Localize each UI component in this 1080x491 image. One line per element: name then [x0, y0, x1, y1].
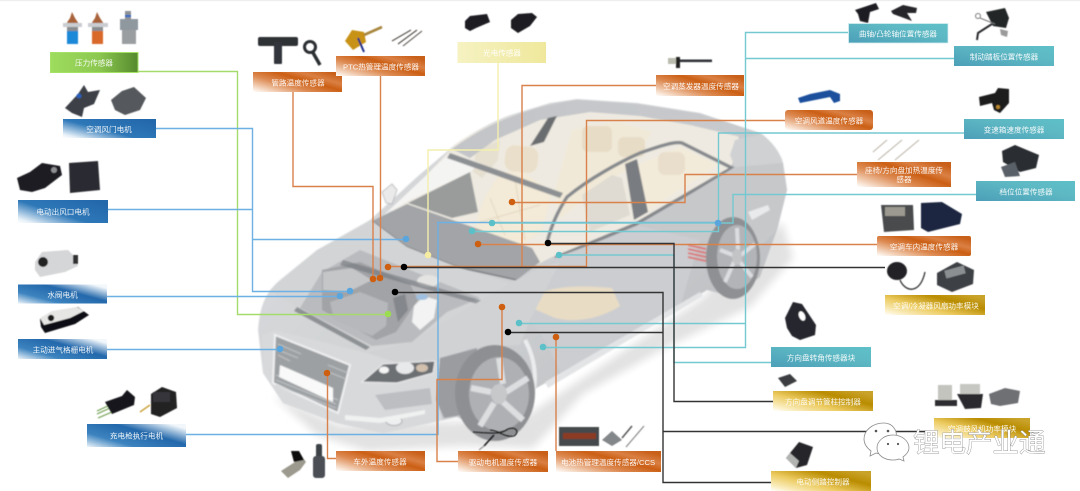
icons: charging gun actuator: [97, 387, 177, 418]
connector line: yellow photoelectric sensor: [428, 63, 498, 255]
watermark: brand text: 锂电产业通: [913, 428, 1046, 458]
suspension behind wheel: [436, 348, 477, 418]
label: evaporator temperature sensor: [656, 75, 744, 96]
label: transmission speed sensor: [964, 119, 1064, 139]
icon: evaporator temperature sensor: [668, 57, 712, 68]
label: battery thermal sensor / CCS: [556, 451, 661, 472]
engine block: [330, 292, 388, 336]
label: charging gun actuator: 充电枪执行电机: [110, 430, 163, 440]
label: seat / steering wheel heating temperature sensor: [857, 162, 951, 187]
label: AC / condenser fan power module: [885, 295, 985, 315]
air intake pipes: [323, 268, 372, 292]
label: photoelectric sensor: 光电传感器: [483, 48, 521, 58]
icons: pressure sensors: [63, 11, 138, 44]
front bumper: [262, 330, 442, 433]
grille: [273, 335, 350, 413]
label: active grille shutter motor: [18, 339, 107, 359]
label: pipeline temperature sensor: [253, 72, 342, 92]
icons: cabin temperature sensors: [881, 202, 962, 232]
greenhouse interior: [388, 101, 739, 270]
icons: battery thermal sensors and CCS: [559, 426, 644, 447]
side mirror: [382, 184, 397, 204]
engine bay: [300, 250, 480, 346]
white expansion tank: [417, 275, 439, 287]
label: blower power module: [934, 418, 1030, 438]
label: steering column adjustment controller: 方向盘调节管柱控制器: [785, 396, 861, 406]
hood surface: [270, 221, 510, 353]
reservoir blue cap: [416, 294, 428, 300]
connector lines: teal position sensors: [472, 32, 976, 362]
front seat headrest: [504, 144, 539, 174]
label: drive motor temperature sensor: 驱动电机温度传感器: [469, 457, 538, 467]
label: brake pedal position sensor: 制动踏板位置传感器: [970, 52, 1039, 62]
label: electric air outlet motor: [18, 200, 108, 223]
icons: blower power modules: [935, 384, 1020, 409]
label: pressure sensor: 压力传感器: [75, 58, 113, 68]
cowl dark line: [372, 221, 517, 280]
label: seat / steering wheel heating temperature sensor: 座椅/方向盘加热温度传: [865, 165, 943, 175]
label: electric side step controller: 电动侧踏控制器: [796, 476, 850, 486]
connector lines: blue motors: [107, 128, 718, 434]
label: cabin temperature sensor: 空调车内温度传感器: [890, 242, 959, 252]
label: evaporator temperature sensor: 空调蒸发器温度传感器: [663, 81, 739, 91]
label: water valve motor: [18, 284, 107, 304]
label: seat / steering wheel heating temperature sensor: 感器: [896, 174, 912, 184]
door sill highlight: [545, 292, 703, 388]
label: steering angle sensor module: 方向盘转角传感器块: [787, 352, 856, 362]
icon: gear position sensor: [1001, 145, 1039, 177]
grille slats: [276, 344, 348, 408]
connector lines: black controllers: [395, 244, 934, 482]
icons: PTC thermal sensors: [345, 27, 422, 52]
label: steering column adjustment controller: [773, 391, 873, 411]
icon: air duct temperature sensor: [798, 90, 840, 103]
top edge strip: [0, 0, 1080, 1]
front wheel: [455, 345, 535, 441]
rear seat headrests: [582, 126, 645, 157]
icon: brake pedal position sensor: [976, 8, 1009, 40]
icons: electric air outlet motors: [17, 161, 100, 193]
label: outside temperature sensor: 车外温度传感器: [353, 456, 407, 466]
label: water valve motor: 水阀电机: [47, 290, 78, 300]
rear quarter panel: [640, 163, 787, 262]
connection dots: [277, 199, 721, 376]
label: HVAC door motor: 空调风门电机: [86, 124, 132, 134]
label: PTC thermal management temperature sensor: PTC热管理温度传感器: [343, 62, 419, 72]
rear deck: [730, 134, 783, 167]
engine bay strips: [294, 307, 370, 350]
lower cabin and door: [530, 226, 700, 372]
label: brake pedal position sensor: [954, 46, 1054, 66]
car body: [258, 99, 787, 433]
icon: electric side step controller: [786, 442, 813, 468]
side window frame: [547, 143, 732, 258]
label: air duct temperature sensor: [785, 110, 873, 130]
licence plate: [279, 365, 333, 402]
icon: transmission speed sensor: [979, 88, 1009, 113]
windshield header bar: [447, 153, 563, 198]
door interior dark trim: [408, 172, 478, 218]
rear seat in window: [638, 147, 718, 210]
label: pipeline temperature sensor: 管路温度传感器: [271, 78, 325, 88]
roof band: [452, 100, 762, 158]
lower front seat: [532, 286, 620, 320]
icon: water valve motor: [35, 250, 78, 277]
label: HVAC door motor: [63, 119, 156, 138]
front spring red: [446, 335, 463, 344]
label: blower power module: 空调鼓风机功率模块: [948, 424, 1017, 434]
engine dark spots: [393, 294, 408, 322]
watermark: WeChat icon: [864, 423, 909, 461]
label: pressure sensor: [50, 52, 138, 72]
icon: steering column controller: [778, 374, 797, 387]
icons: outside temperature sensor: [281, 444, 325, 478]
icon: drive motor temperature sensor cable: [473, 428, 517, 450]
label: PTC thermal management temperature sensor: [336, 56, 425, 76]
front seat stitching: [480, 180, 540, 240]
label: electric side step controller: [771, 471, 871, 491]
label: crankshaft / camshaft position sensor: 曲轴/凸轮轴位置传感器: [859, 28, 937, 38]
label: photoelectric sensor: [458, 42, 546, 63]
label: drive motor temperature sensor: [458, 451, 548, 472]
label: charging gun actuator: [87, 424, 186, 447]
car illustration: [258, 99, 793, 451]
engine bay dark recess: [322, 262, 418, 340]
connector lines: orange temperature sensors: [293, 76, 877, 462]
windshield clear area: [384, 153, 480, 215]
rear spring: [688, 245, 706, 261]
rear reflector: [748, 205, 770, 220]
icons: pipeline temperature sensors: [258, 37, 320, 65]
label: transmission speed sensor: 变速箱速度传感器: [984, 124, 1045, 134]
icon: steering angle sensor: [785, 302, 816, 340]
connector lines: green pressure sensor: [138, 72, 388, 314]
coolant reservoir: [412, 296, 437, 330]
front door window interior: [582, 175, 630, 232]
label: battery thermal sensor / CCS: 电池热管理温度传感器/CCS: [561, 457, 655, 467]
label: electric air outlet motor: 电动出风口电机: [36, 206, 90, 216]
label: outside temperature sensor: [336, 451, 425, 471]
label: gear position sensor: 档位位置传感器: [999, 186, 1053, 196]
B pillar: [625, 159, 648, 220]
rear seats through the roof: [555, 122, 652, 218]
fender: [367, 262, 560, 362]
icons: photoelectric sensors: [465, 13, 537, 33]
passenger seat back: [473, 140, 500, 178]
label: air duct temperature sensor: 空调风道温度传感器: [795, 116, 864, 126]
label: steering angle sensor module: [771, 347, 871, 367]
icon: active grille shutter motor: [40, 307, 89, 333]
fender bright edge: [525, 340, 535, 400]
icon: seat and steering heating sensor wires: [873, 140, 919, 160]
icons: AC condenser fan power module: [887, 262, 974, 292]
rear wheel: [706, 217, 760, 299]
label: cabin temperature sensor: [877, 236, 971, 256]
icons: crankshaft and camshaft sensors: [855, 3, 917, 23]
icons: HVAC door motors: [65, 85, 146, 117]
front seat: [473, 170, 552, 246]
ground shadow: [272, 222, 793, 451]
label: AC / condenser fan power module: 空调/冷凝器风扇功率模块: [893, 300, 979, 310]
rear headrest: [658, 152, 685, 175]
label: crankshaft / camshaft position sensor: [848, 24, 948, 43]
dashboard: [372, 204, 540, 280]
headlight: [362, 361, 435, 383]
fog lamp and bumper trim: [386, 416, 402, 426]
label: gear position sensor: [976, 181, 1075, 201]
label: active grille shutter motor: 主动进气格栅电机: [33, 344, 94, 354]
